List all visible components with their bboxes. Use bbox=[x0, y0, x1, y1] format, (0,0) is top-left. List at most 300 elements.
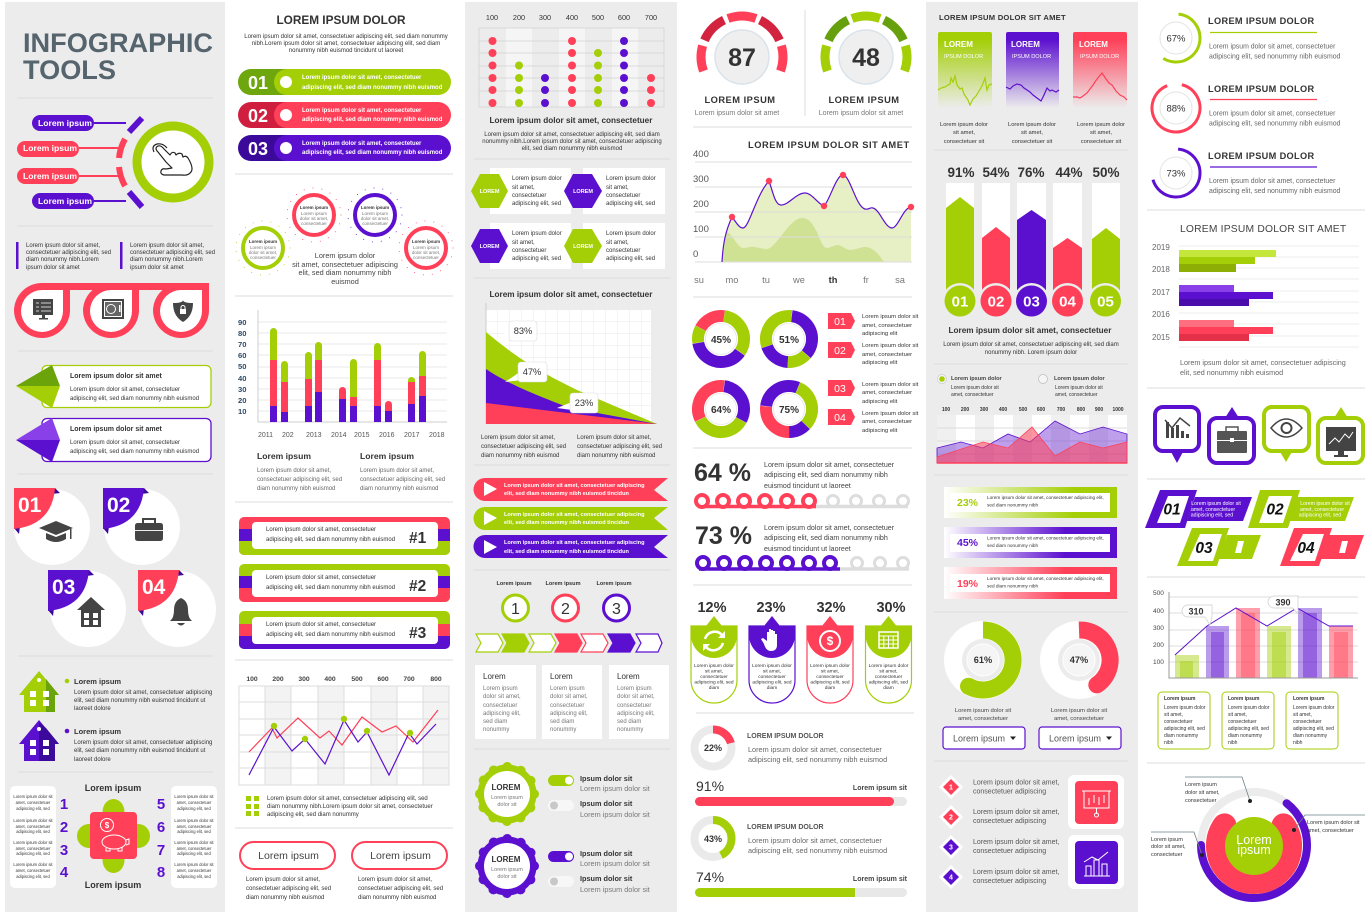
diagram: touch ring with four labels: Lorem ipsum bbox=[23, 171, 77, 181]
horizontal bar chart: 2018 bbox=[1152, 265, 1170, 274]
numbered tags: adipiscing elit bbox=[862, 331, 898, 337]
stacked bar chart: 50 bbox=[238, 362, 246, 371]
ribbon: purple bbox=[474, 535, 668, 558]
dot matrix chart: 200 bbox=[513, 13, 525, 22]
combo bar chart: 100 bbox=[1153, 659, 1164, 666]
parallelogram label 04 bbox=[1280, 528, 1364, 566]
diagram: piggy bank with eight numbered notes: 8 bbox=[157, 864, 165, 881]
diagram: four dotted circles: dolor sit amet, bbox=[412, 250, 440, 255]
numbered diamond list: consectetuer adipiscing bbox=[973, 878, 1046, 885]
pill 02: Lorem ipsum dolor sit amet, consectetuer bbox=[302, 108, 422, 114]
gauge: 87: 87 bbox=[728, 44, 756, 72]
callout: purple arrow card: adipiscing elit, sed diam nonummy nibh euismod bbox=[70, 449, 199, 455]
badge with toggles: purple: Lorem ipsum bbox=[491, 867, 523, 873]
heading with intro: nonummy nibh euismod tincidunt ut laoreet bbox=[289, 48, 404, 54]
progress: 22% and 91%: Lorem ipsum sit bbox=[853, 785, 908, 792]
progress: 22% and 91%: LOREM IPSUM DOLOR bbox=[747, 733, 824, 740]
gradient stat: 23%: sed diam nonummy nibh bbox=[987, 502, 1038, 508]
gradient sparkline cards: Lorem ipsum dolor bbox=[1077, 122, 1125, 128]
stacked bar chart: 30 bbox=[238, 385, 246, 394]
radial: 61%: Lorem ipsum dolor sit bbox=[955, 708, 1012, 714]
text block: two columns under chart bbox=[257, 451, 445, 492]
outlined note cards: Lorem ipsum dolor bbox=[1228, 705, 1270, 711]
text block: two columns bbox=[16, 242, 215, 271]
diagram: piggy bank with eight numbered notes: Lorem ipsum bbox=[85, 880, 141, 890]
gradient stat: 23% bbox=[944, 487, 1117, 518]
text cards: nonummy bbox=[550, 727, 576, 733]
chain progress: 73%: Lorem ipsum dolor sit amet, consectetuer bbox=[764, 524, 895, 532]
pin card: 30%: adipiscing elit, sed bbox=[869, 680, 908, 686]
ranked card 1: #1 bbox=[409, 530, 427, 547]
gradient sparkline cards: consectetuer sit bbox=[1012, 139, 1053, 145]
smooth area chart: 0 bbox=[693, 249, 698, 260]
overlapping area chart: Lorem ipsum dolor bbox=[1054, 376, 1105, 382]
area chart with callouts bbox=[481, 290, 662, 459]
text cards: sed diam bbox=[550, 719, 574, 725]
donut diagram with leaders: consectetuer bbox=[1151, 852, 1183, 858]
progress: 43% and 74%: Lorem ipsum sit bbox=[853, 876, 908, 883]
gauge: 87: LOREM IPSUM bbox=[704, 95, 776, 105]
gradient sparkline cards: sit amet, bbox=[953, 130, 975, 136]
callout: green arrow card: Lorem ipsum dolor sit amet, consectetuer bbox=[70, 387, 180, 393]
outlined note cards: sit amet, bbox=[1293, 712, 1312, 718]
diagram: four dotted circles: sit amet, consectetuer adipiscing bbox=[292, 260, 398, 269]
stacked bar chart bbox=[238, 310, 447, 439]
gradient sparkline cards: IPSUM DOLOR bbox=[1012, 54, 1051, 60]
smooth area chart: su bbox=[694, 275, 704, 285]
arrow bar chart: nonummy nibh. Lorem ipsum dolor bbox=[985, 350, 1077, 356]
callout: 83%: 83% bbox=[514, 326, 532, 336]
ranked card 3: adipiscing elit, sed diam nonummy nibh euismod bbox=[266, 632, 395, 638]
numbered tags: 03 bbox=[834, 383, 846, 395]
ranked card 1: adipiscing elit, sed diam nonummy nibh euismod bbox=[266, 537, 395, 543]
parallelogram label 02: 02 bbox=[1266, 502, 1284, 518]
badge with toggles: purple: LOREM bbox=[492, 855, 521, 864]
list item: purple house: laoreet dolore bbox=[74, 757, 111, 763]
diagram: piggy bank with eight numbered notes: 6 bbox=[157, 819, 165, 836]
smooth area chart: 300 bbox=[693, 174, 709, 185]
parallelogram label 03: 03 bbox=[1195, 540, 1213, 557]
area chart with callouts: consectetuer adipiscing elit, sed bbox=[481, 444, 566, 450]
hexagon cards: adipiscing elit, sed bbox=[606, 201, 655, 207]
icon: growth tile bbox=[1068, 835, 1124, 889]
radial item: 67%: LOREM IPSUM DOLOR bbox=[1208, 16, 1315, 26]
gauge: 87: Lorem ipsum dolor sit amet bbox=[695, 110, 779, 117]
heading with intro: Lorem ipsum dolor sit amet, consectetuer adipiscing elit, sed diam nonummy bbox=[244, 34, 448, 40]
heading with intro: LOREM IPSUM DOLOR bbox=[276, 13, 406, 27]
dot matrix chart: elit, sed diam nonummy nibh euismod bbox=[522, 146, 622, 152]
diagram: four dotted circles: Lorem ipsum bbox=[300, 205, 328, 210]
pill 01: adipiscing elit, sed diam nonummy nibh euismod bbox=[302, 85, 443, 91]
radial: 47%: Lorem ipsum dolor sit bbox=[1051, 708, 1108, 714]
outlined note cards: Lorem ipsum bbox=[1293, 696, 1325, 702]
text cards: sed diam bbox=[483, 719, 507, 725]
donut: 51%: 51% bbox=[779, 335, 799, 346]
badge 02: briefcase: 02 bbox=[107, 494, 130, 517]
outlined note cards bbox=[1158, 692, 1338, 749]
button: right bbox=[352, 842, 447, 901]
chain progress: 64%: Lorem ipsum dolor sit amet, consectetuer bbox=[764, 461, 895, 469]
badge with toggles: green: Lorem ipsum bbox=[491, 795, 523, 801]
ranked card 2: adipiscing elit, sed diam nonummy nibh euismod bbox=[266, 585, 395, 591]
arrow bar chart: 04 bbox=[1059, 294, 1076, 310]
gradient sparkline cards: Lorem ipsum dolor bbox=[1008, 122, 1056, 128]
smooth area chart: 100 bbox=[693, 224, 709, 235]
radial item: 88%: 88% bbox=[1166, 104, 1186, 114]
donut diagram with leaders: amet, consectetuer bbox=[1307, 828, 1354, 834]
legend: chart note: adipiscing elit, sed diam nonummy bbox=[267, 812, 359, 818]
text block: two columns under chart: diam nonummy nibh euismod bbox=[257, 486, 335, 492]
diagram: piggy bank with eight numbered notes: Lorem ipsum dolor sit bbox=[13, 818, 53, 823]
gradient sparkline cards: Lorem ipsum dolor bbox=[940, 122, 988, 128]
parallelogram label 02: amet, consectetuer bbox=[1300, 507, 1344, 513]
heading with intro bbox=[244, 13, 448, 54]
badge with toggles: purple bbox=[478, 836, 650, 896]
stacked bar chart: 20 bbox=[238, 396, 246, 405]
outlined note cards: adipiscing elit, sed bbox=[1164, 726, 1205, 732]
donut diagram with leaders: dolor sit amet, bbox=[1185, 790, 1220, 796]
hexagon cards: adipiscing elit, sed bbox=[512, 201, 561, 207]
diagram: touch ring with four labels: Lorem ipsum bbox=[23, 143, 77, 153]
diagram: four dotted circles: Lorem ipsum bbox=[412, 239, 440, 244]
diagram: piggy bank with eight numbered notes: amet, consectetuer bbox=[177, 868, 212, 873]
donut: 64%: 64% bbox=[711, 405, 731, 416]
chain progress: 64%: adipiscing elit, sed diam nonummy nibh bbox=[764, 471, 888, 479]
parallelogram label 02: Lorem ipsum dolor sit bbox=[1300, 501, 1350, 507]
hexagon cards: sit amet, bbox=[512, 185, 535, 191]
arrow bar chart: 02 bbox=[988, 294, 1004, 310]
overlapping area chart: amet, consectetuer bbox=[1055, 392, 1098, 398]
radial item: 73% bbox=[1150, 147, 1341, 199]
smooth area chart: fr bbox=[863, 275, 869, 285]
dot matrix chart: nonummy nibh.Lorem ipsum dolor sit amet, consectetuer adipiscing bbox=[482, 139, 662, 145]
overlapping area chart: 200 bbox=[961, 407, 969, 413]
area chart with callouts: Lorem ipsum dolor sit amet, bbox=[481, 435, 555, 441]
line chart: 700 bbox=[403, 676, 415, 683]
icon: briefcase pin bbox=[1209, 407, 1254, 463]
diagram: piggy bank with eight numbered notes: Lorem ipsum dolor sit bbox=[174, 794, 214, 799]
text cards: Lorem ipsum bbox=[483, 686, 518, 692]
overlapping area chart: 700 bbox=[1057, 407, 1065, 413]
list item: green house: Lorem ipsum dolor sit amet, consectetuer adipiscing bbox=[74, 690, 212, 696]
ribbon: green: Lorem ipsum dolor sit amet, consectetuer adipiscing bbox=[504, 512, 645, 518]
badge with toggles: purple: Ipsum dolor sit bbox=[580, 849, 633, 858]
text block: two columns: Lorem ipsum dolor sit amet, bbox=[130, 243, 204, 249]
callout: 47%: 47% bbox=[523, 367, 541, 377]
diagram: four dotted circles: euismod bbox=[331, 277, 359, 286]
chain progress: 64% bbox=[694, 459, 908, 507]
hexagon cards: consectetuer bbox=[512, 193, 546, 199]
outlined note cards: consectetuer bbox=[1228, 719, 1257, 725]
hexagon cards: consectetuer bbox=[606, 193, 640, 199]
icon: hand bbox=[761, 629, 777, 651]
icon: chart pin bbox=[1155, 407, 1199, 463]
arrow bar chart: Lorem ipsum dolor sit amet, consectetuer adipiscing elit, sed diam bbox=[943, 342, 1119, 348]
pin card: 12%: diam bbox=[709, 685, 719, 691]
callout: 390 bbox=[1268, 596, 1298, 614]
ranked card 2 bbox=[239, 564, 450, 602]
combo bar chart: 500 bbox=[1153, 590, 1164, 597]
diagram: four dotted circles: elit, sed diam nonummy nibh bbox=[299, 268, 391, 277]
progress: 22% and 91%: Lorem ipsum dolor sit amet, consectetuer bbox=[748, 745, 882, 754]
radial: 61% bbox=[943, 621, 1025, 749]
text block: two columns under chart: Lorem ipsum dolor sit amet, bbox=[360, 468, 434, 474]
badge with toggles: green: Ipsum dolor sit bbox=[580, 799, 633, 808]
numbered tags: 01 bbox=[834, 316, 846, 328]
diagram: piggy bank with eight numbered notes: amet, consectetuer bbox=[177, 846, 212, 851]
gradient stat: 23%: Lorem ipsum dolor sit amet, consectetuer adipiscing elit, bbox=[987, 495, 1104, 500]
line chart: 200 bbox=[272, 676, 284, 683]
list item: green house: elit, sed diam nonummy nibh euismod tincidunt ut bbox=[74, 698, 206, 704]
text block: two columns: consectetuer adipiscing elit, sed bbox=[26, 250, 111, 256]
combo bar chart: 300 bbox=[1153, 625, 1164, 632]
callout: 83% bbox=[497, 321, 537, 341]
diagram: piggy bank with eight numbered notes: Lorem ipsum dolor sit bbox=[174, 818, 214, 823]
panel: column 6 bbox=[1145, 12, 1365, 898]
chain progress: 73%: 73 % bbox=[695, 522, 752, 550]
badge with toggles: purple: Lorem ipsum dolor sit bbox=[580, 859, 650, 868]
outlined note cards: diam nonummy bbox=[1164, 733, 1199, 739]
progress: 43% and 74%: adipiscing elit, sed nonummy nibh euismod bbox=[748, 846, 887, 855]
numbered tags: Lorem ipsum dolor sit bbox=[862, 343, 919, 349]
hexagon cards: consectetuer bbox=[512, 248, 546, 254]
text block: two columns: ipsum dolor sit amet bbox=[130, 265, 184, 271]
icon: monitor checklist bbox=[33, 299, 53, 320]
diagram: piggy bank with eight numbered notes: amet, consectetuer bbox=[16, 800, 51, 805]
pin card: 23%: consectetuer bbox=[758, 674, 786, 680]
smooth area chart: th bbox=[829, 275, 838, 285]
radial: 61%: 61% bbox=[974, 655, 992, 665]
pin card: 30% bbox=[866, 600, 912, 703]
hexagon cards: LOREM bbox=[480, 244, 500, 250]
overlapping area chart bbox=[937, 374, 1127, 463]
ranked card 3: #3 bbox=[409, 625, 427, 642]
hexagon cards: Lorem ipsum dolor bbox=[606, 176, 656, 182]
radial item: 73%: Lorem ipsum dolor sit amet, consectetuer bbox=[1209, 178, 1336, 185]
ranked card 1: Lorem ipsum dolor sit amet, consectetuer bbox=[266, 527, 376, 533]
pin card: 32% bbox=[807, 600, 853, 703]
icon: dollar coin: $ bbox=[827, 634, 834, 648]
diagram: piggy bank with eight numbered notes: amet, consectetuer bbox=[16, 824, 51, 829]
pin card: 12% bbox=[691, 600, 737, 703]
panel: column 2 bbox=[235, 13, 453, 901]
list item: green house: laoreet dolore bbox=[74, 706, 111, 712]
horizontal bar chart: 2017 bbox=[1152, 288, 1170, 297]
progress: 43% and 74%: Lorem ipsum dolor sit amet, consectetuer bbox=[748, 836, 882, 845]
list item: purple house: Lorem ipsum dolor sit amet, consectetuer adipiscing bbox=[74, 740, 212, 746]
pin card: 32%: Lorem ipsum dolor bbox=[810, 663, 850, 669]
pin card: 30%: consectetuer bbox=[875, 674, 903, 680]
overlapping area chart: 100 bbox=[942, 407, 950, 413]
gradient sparkline cards: IPSUM DOLOR bbox=[1080, 54, 1119, 60]
pill 02: 02 bbox=[248, 106, 268, 126]
pill 02 bbox=[238, 102, 451, 128]
diagram: piggy bank with eight numbered notes: amet, consectetuer bbox=[177, 800, 212, 805]
diagram: four dotted circles: consectetuer bbox=[413, 255, 439, 260]
pin card: 23%: Lorem ipsum dolor bbox=[752, 663, 792, 669]
parallelogram label 01: 01 bbox=[1163, 502, 1181, 518]
progress: 43% and 74%: 43% bbox=[704, 834, 722, 844]
text cards: adipiscing elit, bbox=[617, 711, 655, 717]
text cards: sed diam bbox=[617, 719, 641, 725]
radial item: 88% bbox=[1147, 79, 1341, 137]
arrow bar chart: 54% bbox=[982, 165, 1010, 180]
dropdown: left: Lorem ipsum bbox=[953, 734, 1005, 744]
pin card: 12%: adipiscing elit, sed bbox=[694, 680, 734, 686]
parallelogram label 02 bbox=[1248, 490, 1354, 528]
numbered tags: amet, consectetuer bbox=[862, 419, 912, 425]
hexagon cards bbox=[471, 168, 665, 269]
hexagon cards: sit amet, bbox=[606, 240, 629, 246]
area chart with callouts: diam nonummy nibh euismod bbox=[577, 453, 655, 459]
diagram: four dotted circles: consectetuer bbox=[301, 221, 327, 226]
overlapping area chart: 600 bbox=[1037, 407, 1045, 413]
list item: purple house: Lorem ipsum bbox=[74, 727, 121, 736]
hexagon cards: sit amet, bbox=[606, 185, 629, 191]
gradient sparkline cards: consectetuer sit bbox=[944, 139, 985, 145]
icon: presentation tile bbox=[1068, 775, 1124, 829]
numbered diamond list: 1 bbox=[949, 784, 953, 792]
stacked bar chart: 10 bbox=[238, 407, 246, 416]
badge with toggles: purple: dolor sit bbox=[497, 874, 517, 880]
numbered steps: 2 bbox=[561, 601, 570, 618]
gauge: 48 bbox=[819, 16, 907, 117]
outlined note cards: adipiscing elit, sed bbox=[1293, 726, 1334, 732]
badge with toggles: green: LOREM bbox=[492, 783, 521, 792]
legend: chart note: Lorem ipsum dolor sit amet, consectetuer adipiscing elit, sed bbox=[267, 796, 428, 802]
pin card: 32%: sit amet, bbox=[821, 668, 839, 674]
icon: pointing hand bbox=[153, 144, 192, 175]
badge with toggles: green: Lorem ipsum dolor sit bbox=[580, 784, 650, 793]
outlined note cards: sit amet, bbox=[1228, 712, 1247, 718]
pin card: 12%: 12% bbox=[697, 600, 727, 616]
stacked bar chart: 60 bbox=[238, 351, 246, 360]
parallelogram label 04: 04 bbox=[1297, 540, 1315, 557]
radial: 47% bbox=[1039, 621, 1121, 749]
hexagon cards: Lorem ipsum dolor bbox=[512, 231, 562, 237]
arrow bar chart: 01 bbox=[952, 294, 968, 310]
donut diagram with leaders bbox=[1151, 777, 1365, 898]
area chart with callouts: diam nonummy nibh euismod bbox=[481, 453, 559, 459]
radial item: 67%: Lorem ipsum dolor sit amet, consectetuer bbox=[1209, 44, 1336, 50]
callout: green arrow card: adipiscing elit, sed diam nonummy nibh euismod bbox=[70, 396, 199, 402]
outlined note cards: nibh bbox=[1164, 740, 1174, 746]
diagram: four dotted circles: Lorem ipsum dolor bbox=[315, 251, 376, 260]
text cards: adipiscing elit, bbox=[483, 711, 521, 717]
numbered tags: adipiscing elit bbox=[862, 399, 898, 405]
outlined note cards: diam nonummy bbox=[1228, 733, 1263, 739]
list item: green house bbox=[19, 671, 212, 712]
panel: column 4 bbox=[689, 10, 919, 897]
horizontal bar chart: Lorem ipsum dolor sit amet, consectetuer adipiscing bbox=[1180, 358, 1346, 367]
pill 03: Lorem ipsum dolor sit amet, consectetuer bbox=[302, 141, 422, 147]
pill 02: adipiscing elit, sed diam nonummy nibh euismod bbox=[302, 117, 443, 123]
parallelogram label 01 bbox=[1145, 490, 1252, 528]
arrow bar chart: 03 bbox=[1023, 294, 1040, 310]
legend: chart note: diam nonummy nibh.Lorem ipsum dolor sit amet, consectetuer bbox=[267, 804, 433, 810]
diagram: piggy bank with eight numbered notes: Lorem ipsum dolor sit bbox=[13, 840, 53, 845]
diagram: four dotted circles: Lorem ipsum bbox=[362, 211, 388, 216]
callout: 310: 310 bbox=[1188, 606, 1204, 616]
area chart with callouts: consectetuer adipiscing elit, sed bbox=[577, 444, 662, 450]
numbered steps: Lorem ipsum bbox=[596, 581, 632, 587]
heading with intro: nibh.Lorem ipsum dolor sit amet, consectetuer adipiscing elit, sed diam bbox=[252, 41, 440, 47]
stacked bar chart: 80 bbox=[238, 329, 246, 338]
pin card: 23% bbox=[749, 600, 795, 703]
gradient stat: 23%: 23% bbox=[957, 497, 979, 509]
numbered tags: adipiscing elit bbox=[862, 428, 898, 434]
donut: 75% bbox=[756, 376, 822, 442]
text cards: consectetuer bbox=[483, 703, 517, 709]
outlined note cards: diam nonummy bbox=[1293, 733, 1328, 739]
overlapping area chart: 900 bbox=[1095, 407, 1103, 413]
icon: safe bbox=[103, 300, 123, 318]
numbered steps: 1 bbox=[511, 601, 520, 618]
icon: eye pin bbox=[1264, 407, 1309, 462]
pin card: 32%: diam bbox=[825, 685, 835, 691]
radial item: 88%: adipiscing elit, sed nonummy nibh euismod bbox=[1209, 120, 1341, 128]
diagram: piggy bank with eight numbered notes: adipiscing elit, sed bbox=[16, 851, 50, 856]
ranked card 3 bbox=[239, 611, 450, 649]
text block: two columns under chart: Lorem ipsum bbox=[360, 451, 414, 461]
diagram: four dotted circles: Lorem ipsum bbox=[250, 245, 276, 250]
numbered diamond list: Lorem ipsum dolor sit amet, bbox=[973, 780, 1059, 786]
outlined note cards: Lorem ipsum bbox=[1228, 696, 1260, 702]
text cards: Lorem bbox=[617, 672, 640, 681]
radial item: 67%: 67% bbox=[1166, 34, 1186, 44]
diagram: touch ring with four labels bbox=[17, 115, 209, 209]
panel: column 3 bbox=[465, 2, 677, 912]
smooth area chart: 400 bbox=[693, 149, 709, 160]
hexagon cards: consectetuer bbox=[606, 248, 640, 254]
pill 01 bbox=[238, 69, 451, 95]
combo bar chart: 200 bbox=[1153, 642, 1164, 649]
outlined note cards: sit amet, bbox=[1164, 712, 1183, 718]
gradient sparkline cards: sit amet, bbox=[1090, 130, 1112, 136]
outlined note cards: nibh bbox=[1293, 740, 1303, 746]
donut diagram with leaders: dolor sit amet, bbox=[1151, 844, 1186, 850]
pin card: 23%: sit amet, bbox=[763, 668, 781, 674]
hexagon cards: LOREM bbox=[573, 189, 593, 195]
arrow bar chart: 76% bbox=[1017, 165, 1045, 180]
arrow bar chart: 50% bbox=[1092, 165, 1120, 180]
progress: 43% and 74%: LOREM IPSUM DOLOR bbox=[747, 824, 824, 831]
badge 01: graduation bbox=[14, 488, 90, 565]
parallelogram label 01: adipiscing elit, sed bbox=[1191, 512, 1233, 518]
stacked bar chart: 2016 bbox=[379, 432, 395, 439]
text cards: consectetuer bbox=[550, 703, 584, 709]
numbered tags: amet, consectetuer bbox=[862, 323, 912, 329]
outlined note cards: Lorem ipsum bbox=[1164, 696, 1196, 702]
diagram: piggy bank with eight numbered notes: Lorem ipsum bbox=[85, 783, 141, 793]
button: right: consectetuer adipiscing elit, sed bbox=[358, 886, 443, 892]
stacked bar chart: 2011 bbox=[258, 432, 273, 439]
numbered tags: adipiscing elit bbox=[862, 360, 898, 366]
parallelogram label 01: Lorem ipsum dolor sit bbox=[1191, 501, 1241, 507]
diagram: red teardrop band bbox=[14, 283, 209, 338]
text cards: nonummy bbox=[483, 727, 509, 733]
donut diagram with leaders: Lorem ipsum dolor sit bbox=[1307, 820, 1360, 826]
parallelogram label 01: amet, consectetuer bbox=[1191, 507, 1235, 513]
diagram: piggy bank with eight numbered notes: Lorem ipsum dolor sit bbox=[13, 862, 53, 867]
radial: 47%: amet, consectetuer bbox=[1054, 716, 1104, 722]
icon: monitor pin bbox=[1318, 407, 1363, 463]
progress: 22% and 91%: 22% bbox=[704, 743, 722, 753]
diagram: piggy bank with eight numbered notes: adipiscing elit, sed bbox=[16, 829, 50, 834]
smooth area chart: tu bbox=[762, 275, 770, 285]
diagram: piggy bank with eight numbered notes: amet, consectetuer bbox=[16, 846, 51, 851]
diagram: piggy bank with eight numbered notes: 7 bbox=[157, 842, 165, 859]
